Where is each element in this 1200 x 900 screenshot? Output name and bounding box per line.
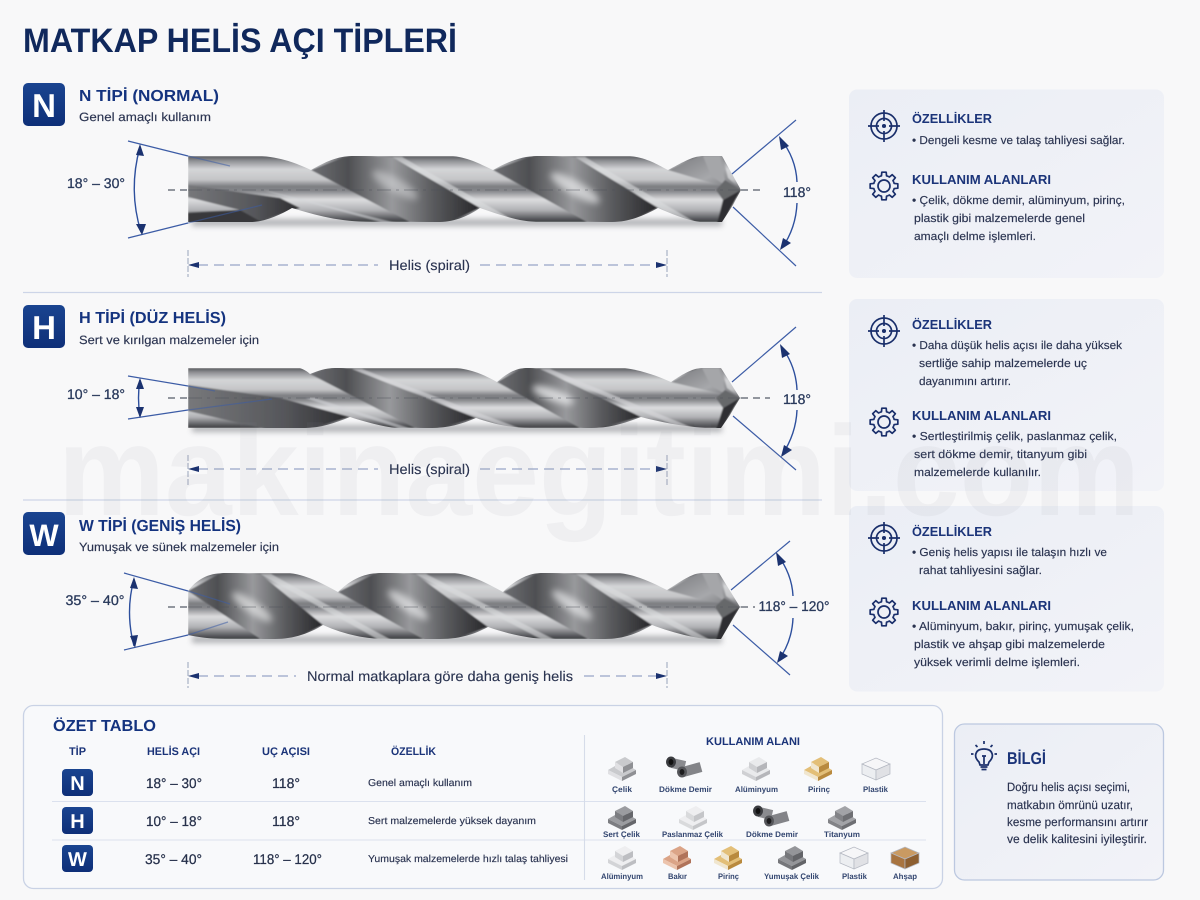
materials: row N: Çelik (612, 785, 633, 794)
heading: summary table: ÖZET TABLO (53, 717, 156, 735)
angle: H point 118 (732, 327, 811, 470)
badge: H: H (32, 309, 56, 346)
text: info (1007, 780, 1148, 846)
drill: H type (188, 366, 741, 432)
angle: N helix 18-30 (67, 141, 262, 238)
badge: H (23, 305, 65, 348)
text: features: • Geniş helis yapısı ile talaşın hızlı ve (912, 547, 1107, 559)
table header: UÇ AÇISI (262, 746, 310, 758)
materials: row H: Paslanmaz Çelik (662, 830, 724, 839)
text: use areas: amaçlı delme işlemleri. (914, 231, 1036, 243)
table header (69, 745, 436, 758)
row: N (62, 769, 472, 796)
materials: row H: Titanyum (824, 830, 860, 839)
row: N: 118° (272, 775, 300, 791)
row: N: N (70, 773, 85, 795)
angle: N point 118 (732, 120, 811, 266)
text: use areas: • Çelik, dökme demir, alüminyum, pirinç, (912, 195, 1125, 207)
row: H: 118° (272, 813, 300, 829)
badge: N (23, 83, 65, 126)
materials: row N (608, 756, 890, 794)
text: use areas (912, 621, 1134, 669)
panel: N info (849, 90, 1164, 278)
heading: features: ÖZELLİKLER (912, 524, 993, 539)
text: info: Doğru helis açısı seçimi, (1007, 780, 1130, 794)
text: features: sertliğe sahip malzemelerde uç (919, 358, 1087, 370)
icon: target (868, 110, 900, 142)
drill: W type (188, 571, 741, 643)
badge: W (23, 512, 65, 555)
angle: N point 118: 118° (783, 184, 811, 200)
icon: target (868, 522, 900, 554)
text: features: • Daha düşük helis açısı ile daha yüksek (912, 340, 1122, 352)
row: H: Sert malzemelerde yüksek dayanım (368, 816, 536, 827)
angle: H helix 10-18 (67, 376, 272, 419)
text: features (912, 547, 1107, 577)
heading: use areas: KULLANIM ALANLARI (912, 408, 1051, 423)
row: N: 18° – 30° (146, 775, 202, 791)
text: features: dayanımını artırır. (919, 376, 1011, 388)
subheading: N type: Genel amaçlı kullanım (79, 110, 211, 124)
text: info: ve delik kalitesini iyileştirir. (1007, 832, 1147, 846)
table header: TİP (69, 745, 86, 758)
dimension: N helix (188, 250, 667, 277)
dimension: H helix: Helis (spiral) (389, 461, 470, 477)
row: W: 118° – 120° (253, 851, 322, 867)
table header: HELİS AÇI (147, 745, 200, 758)
section: H type header (23, 305, 259, 348)
text: use areas: • Alüminyum, bakır, pirinç, yumuşak çelik, (912, 621, 1134, 633)
table header: ÖZELLİK (391, 745, 436, 758)
row: W: 35° – 40° (145, 851, 202, 867)
materials: row H: Sert Çelik (603, 830, 641, 839)
text: use areas: sert dökme demir, titanyum gibi (914, 449, 1087, 461)
panel: summary table (24, 706, 942, 888)
materials: row N: Plastik (863, 785, 889, 794)
row: W (62, 845, 568, 872)
text: use areas: plastik ve ahşap gibi malzemelerde (914, 639, 1105, 651)
materials: row W: Yumuşak Çelik (764, 872, 820, 881)
icon: gear (870, 172, 898, 200)
materials: row W: Plastik (842, 872, 868, 881)
text: use areas (912, 431, 1117, 479)
heading: use areas: KULLANIM ALANLARI (912, 172, 1051, 187)
panel: W info (849, 506, 1164, 692)
text: features: • Dengeli kesme ve talaş tahliyesi sağlar. (912, 135, 1125, 147)
watermark: makinaegitimi.com (58, 400, 1140, 543)
angle: W helix 35-40: 35° – 40° (66, 592, 124, 608)
badge: W: W (29, 518, 59, 553)
heading: W type: W TİPİ (GENİŞ HELİS) (79, 517, 241, 535)
materials: row W: Bakır (668, 872, 687, 881)
dimension: W helix: Normal matkaplara göre daha geniş helis (307, 668, 573, 684)
materials: row W (601, 846, 919, 881)
dimension: H helix (188, 455, 667, 485)
materials: row H: Dökme Demir (746, 830, 798, 839)
subheading: W type: Yumuşak ve sünek malzemeler için (79, 540, 279, 554)
angle: N helix 18-30: 18° – 30° (67, 175, 125, 191)
text: use areas: malzemelerde kullanılır. (914, 467, 1041, 479)
title: MATKAP HELİS AÇI TİPLERİ (23, 22, 457, 60)
icon: light bulb (971, 741, 997, 770)
heading: H type: H TİPİ (DÜZ HELİS) (79, 309, 226, 327)
angle: H helix 10-18: 10° – 18° (67, 386, 125, 402)
row: W: Yumuşak malzemelerde hızlı talaş tahliyesi (368, 854, 568, 865)
text: use areas: • Sertleştirilmiş çelik, paslanmaz çelik, (912, 431, 1117, 443)
heading: N type: N TİPİ (NORMAL) (79, 87, 219, 105)
materials: row N: Dökme Demir (659, 785, 712, 794)
materials: row W: Alüminyum (601, 872, 643, 881)
heading: info: BİLGİ (1007, 749, 1046, 768)
text: use areas: yüksek verimli delme işlemleri. (914, 657, 1080, 669)
dimension: N helix: Helis (spiral) (389, 257, 470, 273)
icon: gear (870, 598, 898, 626)
panel: info (954, 724, 1164, 880)
text: info: matkabın ömrünü uzatır, (1007, 798, 1133, 812)
heading: use areas: KULLANIM ALANLARI (912, 598, 1051, 613)
badge: N: N (32, 87, 56, 124)
angle: W helix 35-40 (66, 573, 230, 650)
heading: features: ÖZELLİKLER (912, 111, 993, 126)
angle: H point 118: 118° (783, 391, 811, 407)
subheading: H type: Sert ve kırılgan malzemeler için (79, 333, 259, 347)
materials: row W: Pirinç (718, 872, 740, 881)
heading: features: ÖZELLİKLER (912, 317, 993, 332)
materials: row N: Pirinç (808, 785, 831, 794)
text: features (912, 340, 1122, 388)
row: N: Genel amaçlı kullanım (368, 778, 472, 789)
angle: W point 118-120 (731, 541, 830, 675)
text: use areas (912, 195, 1125, 243)
icon: gear (870, 408, 898, 436)
text: use areas: plastik gibi malzemelerde genel (914, 213, 1085, 225)
materials: row W: Ahşap (893, 872, 917, 881)
row: H (62, 807, 536, 834)
section: W type header (23, 512, 279, 555)
icon: target (868, 315, 900, 347)
text: features: rahat tahliyesini sağlar. (919, 565, 1042, 577)
dimension: W helix (188, 662, 667, 688)
panel: H info (849, 299, 1164, 491)
angle: W point 118-120: 118° – 120° (758, 598, 830, 614)
materials: row N: Alüminyum (735, 785, 778, 794)
heading: use area column: KULLANIM ALANI (706, 736, 800, 748)
drill: N type (188, 154, 741, 226)
text: info: kesme performansını artırır (1007, 815, 1148, 829)
materials: row H (603, 806, 860, 839)
row: H: 10° – 18° (146, 813, 202, 829)
section: N type header (23, 83, 219, 126)
row: H: H (70, 811, 85, 833)
row: W: W (68, 849, 87, 871)
